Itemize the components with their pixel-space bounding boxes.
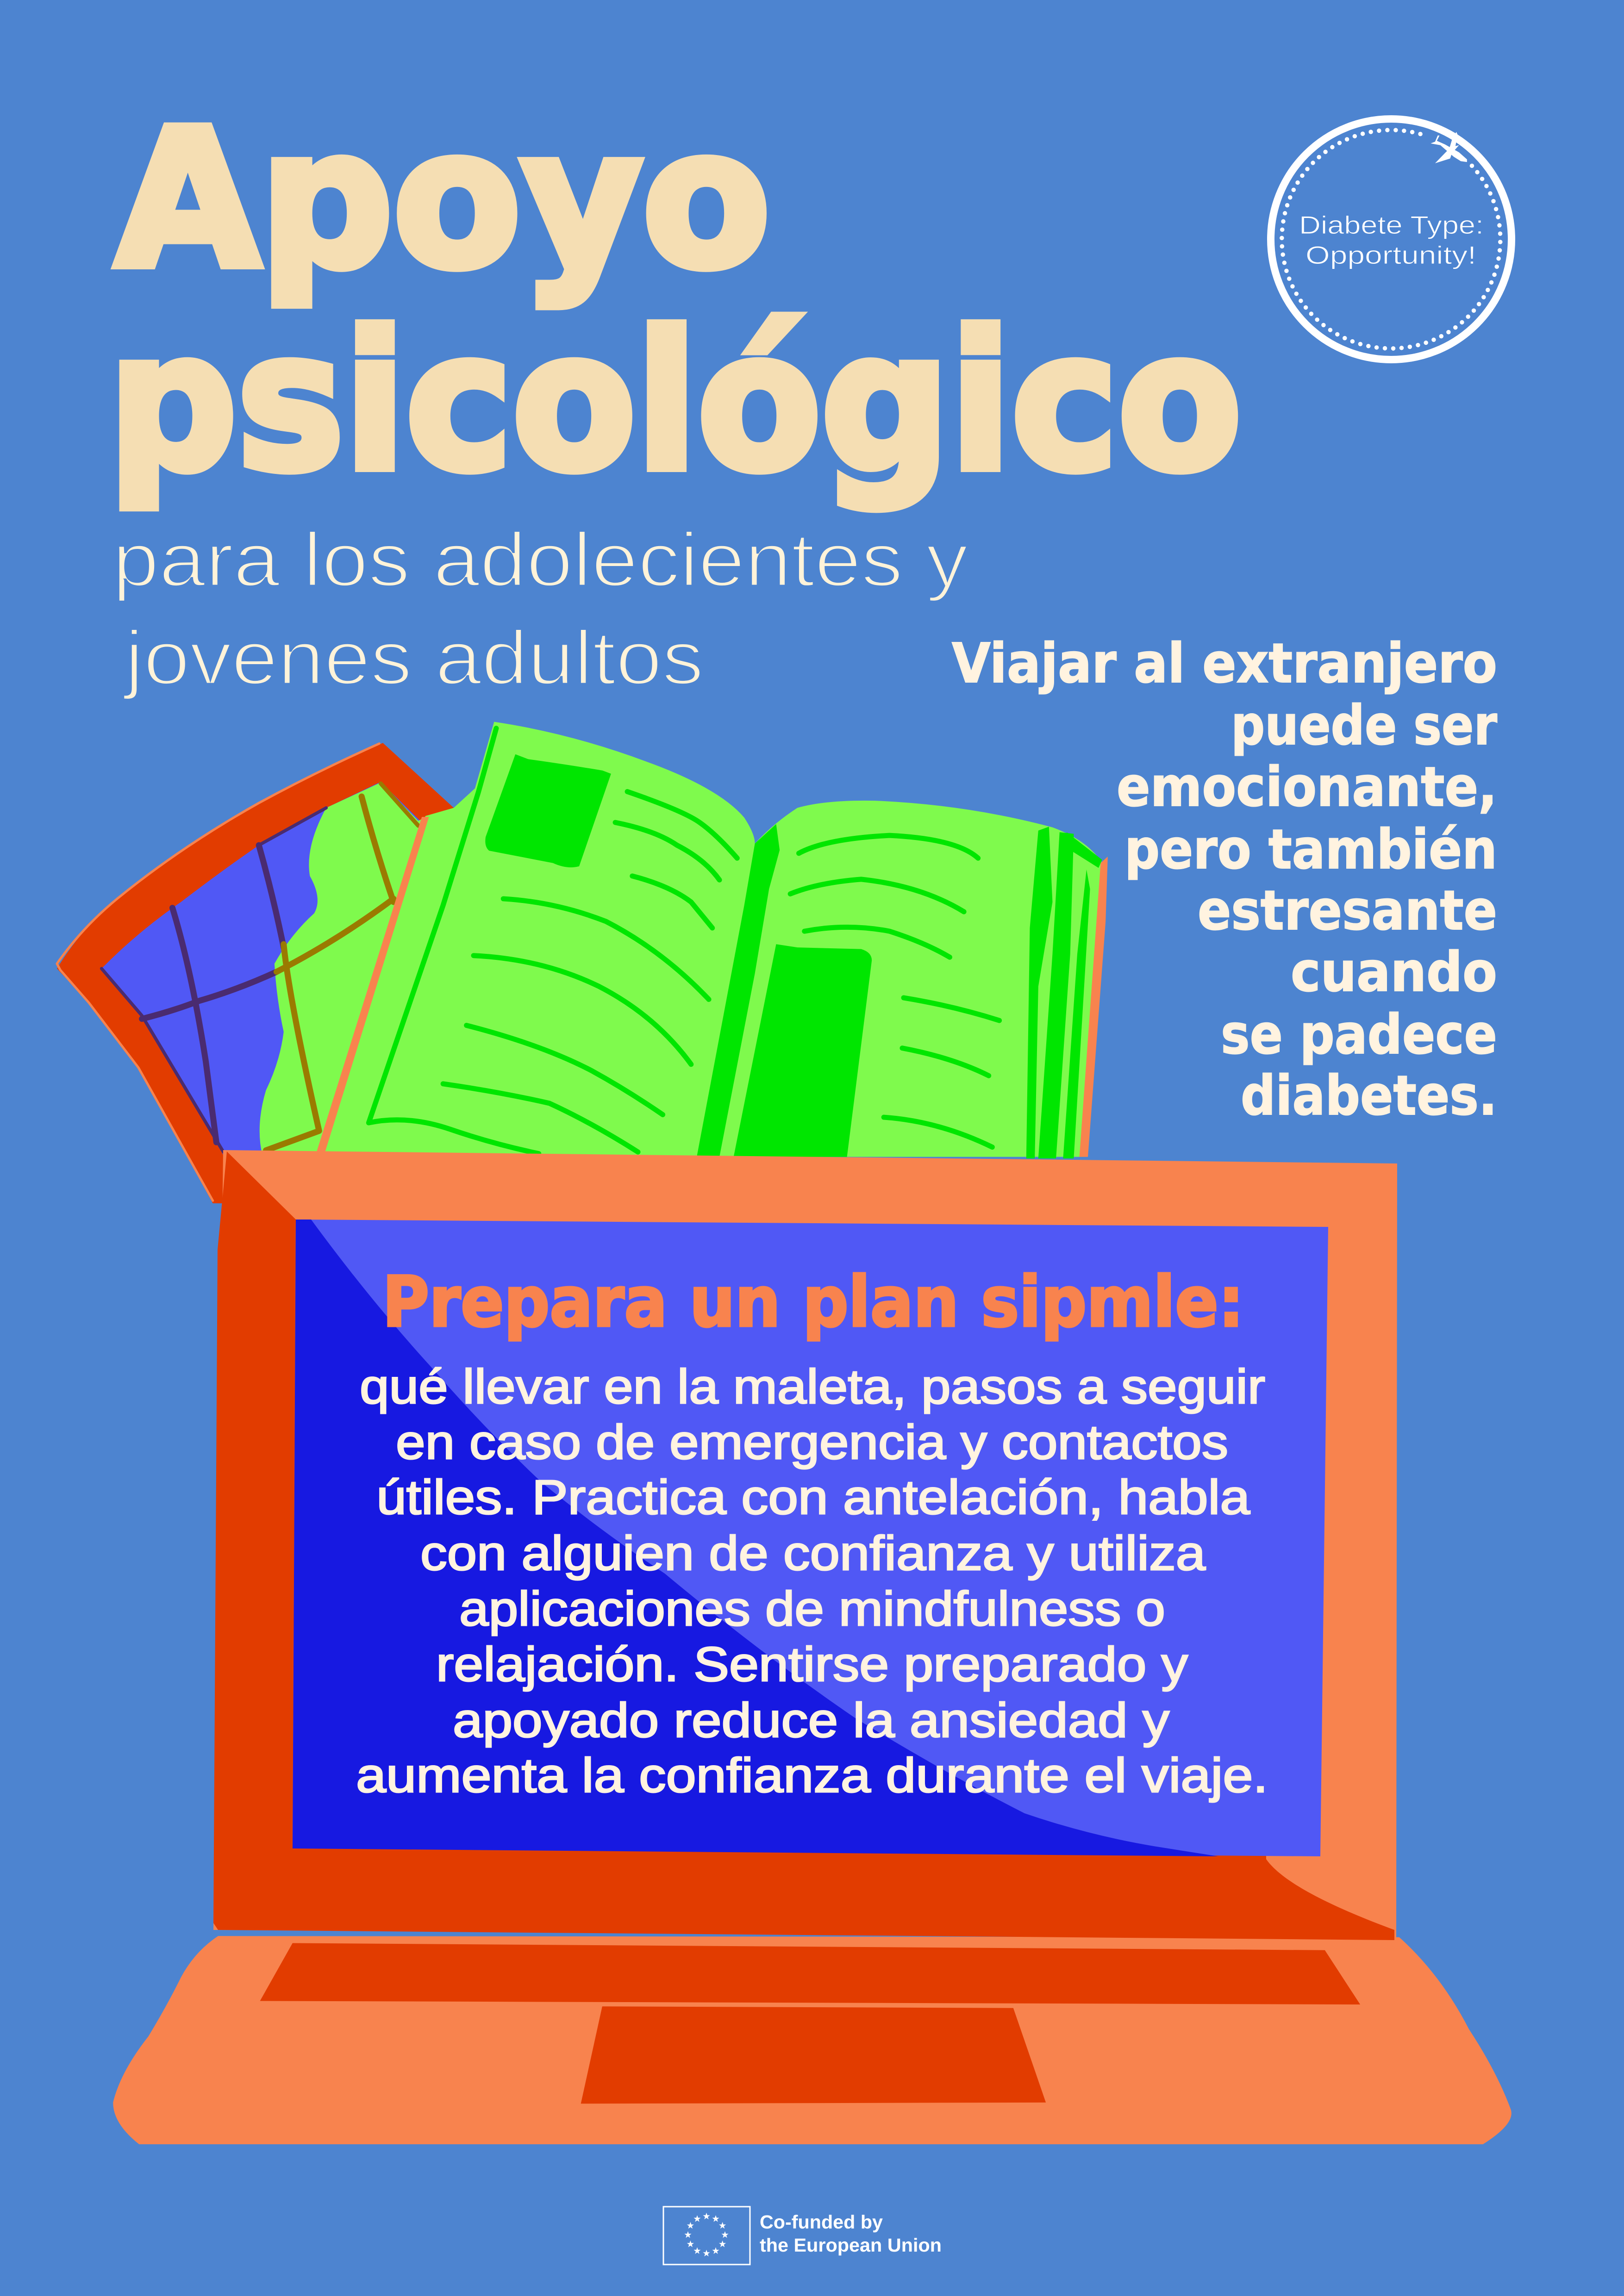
intro text: pero también <box>1124 817 1497 881</box>
EU text: Co-funded by <box>760 2211 883 2233</box>
body text: útiles. Practica con antelación, habla <box>376 1470 1250 1524</box>
illustration: map <box>57 743 454 1203</box>
intro text: Viajar al extranjero <box>952 631 1497 695</box>
EU text <box>760 2211 942 2256</box>
lid shadow <box>213 1151 1394 1940</box>
EU flag <box>663 2207 750 2265</box>
intro text: emocionante, <box>1117 755 1497 819</box>
intro text: estresante <box>1198 878 1497 942</box>
subtitle: para los adolecientes y <box>112 517 968 602</box>
badge: Diabete Type Opportunity <box>1271 119 1512 360</box>
subtitle <box>112 517 968 700</box>
body text: en caso de emergencia y contactos <box>396 1415 1228 1469</box>
logo: EU co-funded <box>663 2207 942 2265</box>
EU text: the European Union <box>760 2234 942 2256</box>
title <box>108 90 1242 513</box>
body text: apoyado reduce la ansiedad y <box>453 1693 1170 1748</box>
intro text: diabetes. <box>1241 1064 1497 1127</box>
intro text: cuando <box>1291 940 1497 1004</box>
screen shadow <box>293 1220 1218 1856</box>
body text <box>356 1360 1268 1803</box>
icon: airplane <box>1430 132 1467 163</box>
title: psicológico <box>108 292 1242 513</box>
intro text <box>952 631 1497 1127</box>
body text: aumenta la confianza durante el viaje. <box>356 1748 1268 1803</box>
title: Apoyo <box>116 90 770 310</box>
keyboard <box>260 1943 1360 2004</box>
illustration: laptop base <box>113 1936 1512 2144</box>
book pictures and text lines <box>369 728 1102 1158</box>
body text: qué llevar en la maleta, pasos a seguir <box>360 1360 1265 1414</box>
trackpad <box>581 2006 1046 2103</box>
intro text: se padece <box>1221 1002 1497 1066</box>
heading: Prepara un plan sipmle: Prepara un plan sipmle: <box>382 1262 1244 1343</box>
book cover edges <box>316 817 429 1155</box>
illustration: open book <box>316 722 1108 1158</box>
body text: con alguien de confianza y utiliza <box>420 1526 1206 1580</box>
illustration: laptop lid <box>213 1150 1397 1940</box>
screen <box>293 1220 1328 1856</box>
body text: relajación. Sentirse preparado y <box>436 1637 1188 1692</box>
subtitle: jovenes adultos <box>123 615 704 700</box>
book pages <box>319 722 1102 1157</box>
intro text: puede ser <box>1231 693 1497 757</box>
badge text: Opportunity! <box>1305 241 1476 269</box>
badge text <box>1299 211 1484 269</box>
body text: aplicaciones de mindfulness o <box>459 1582 1165 1636</box>
badge text: Diabete Type: <box>1299 211 1484 239</box>
